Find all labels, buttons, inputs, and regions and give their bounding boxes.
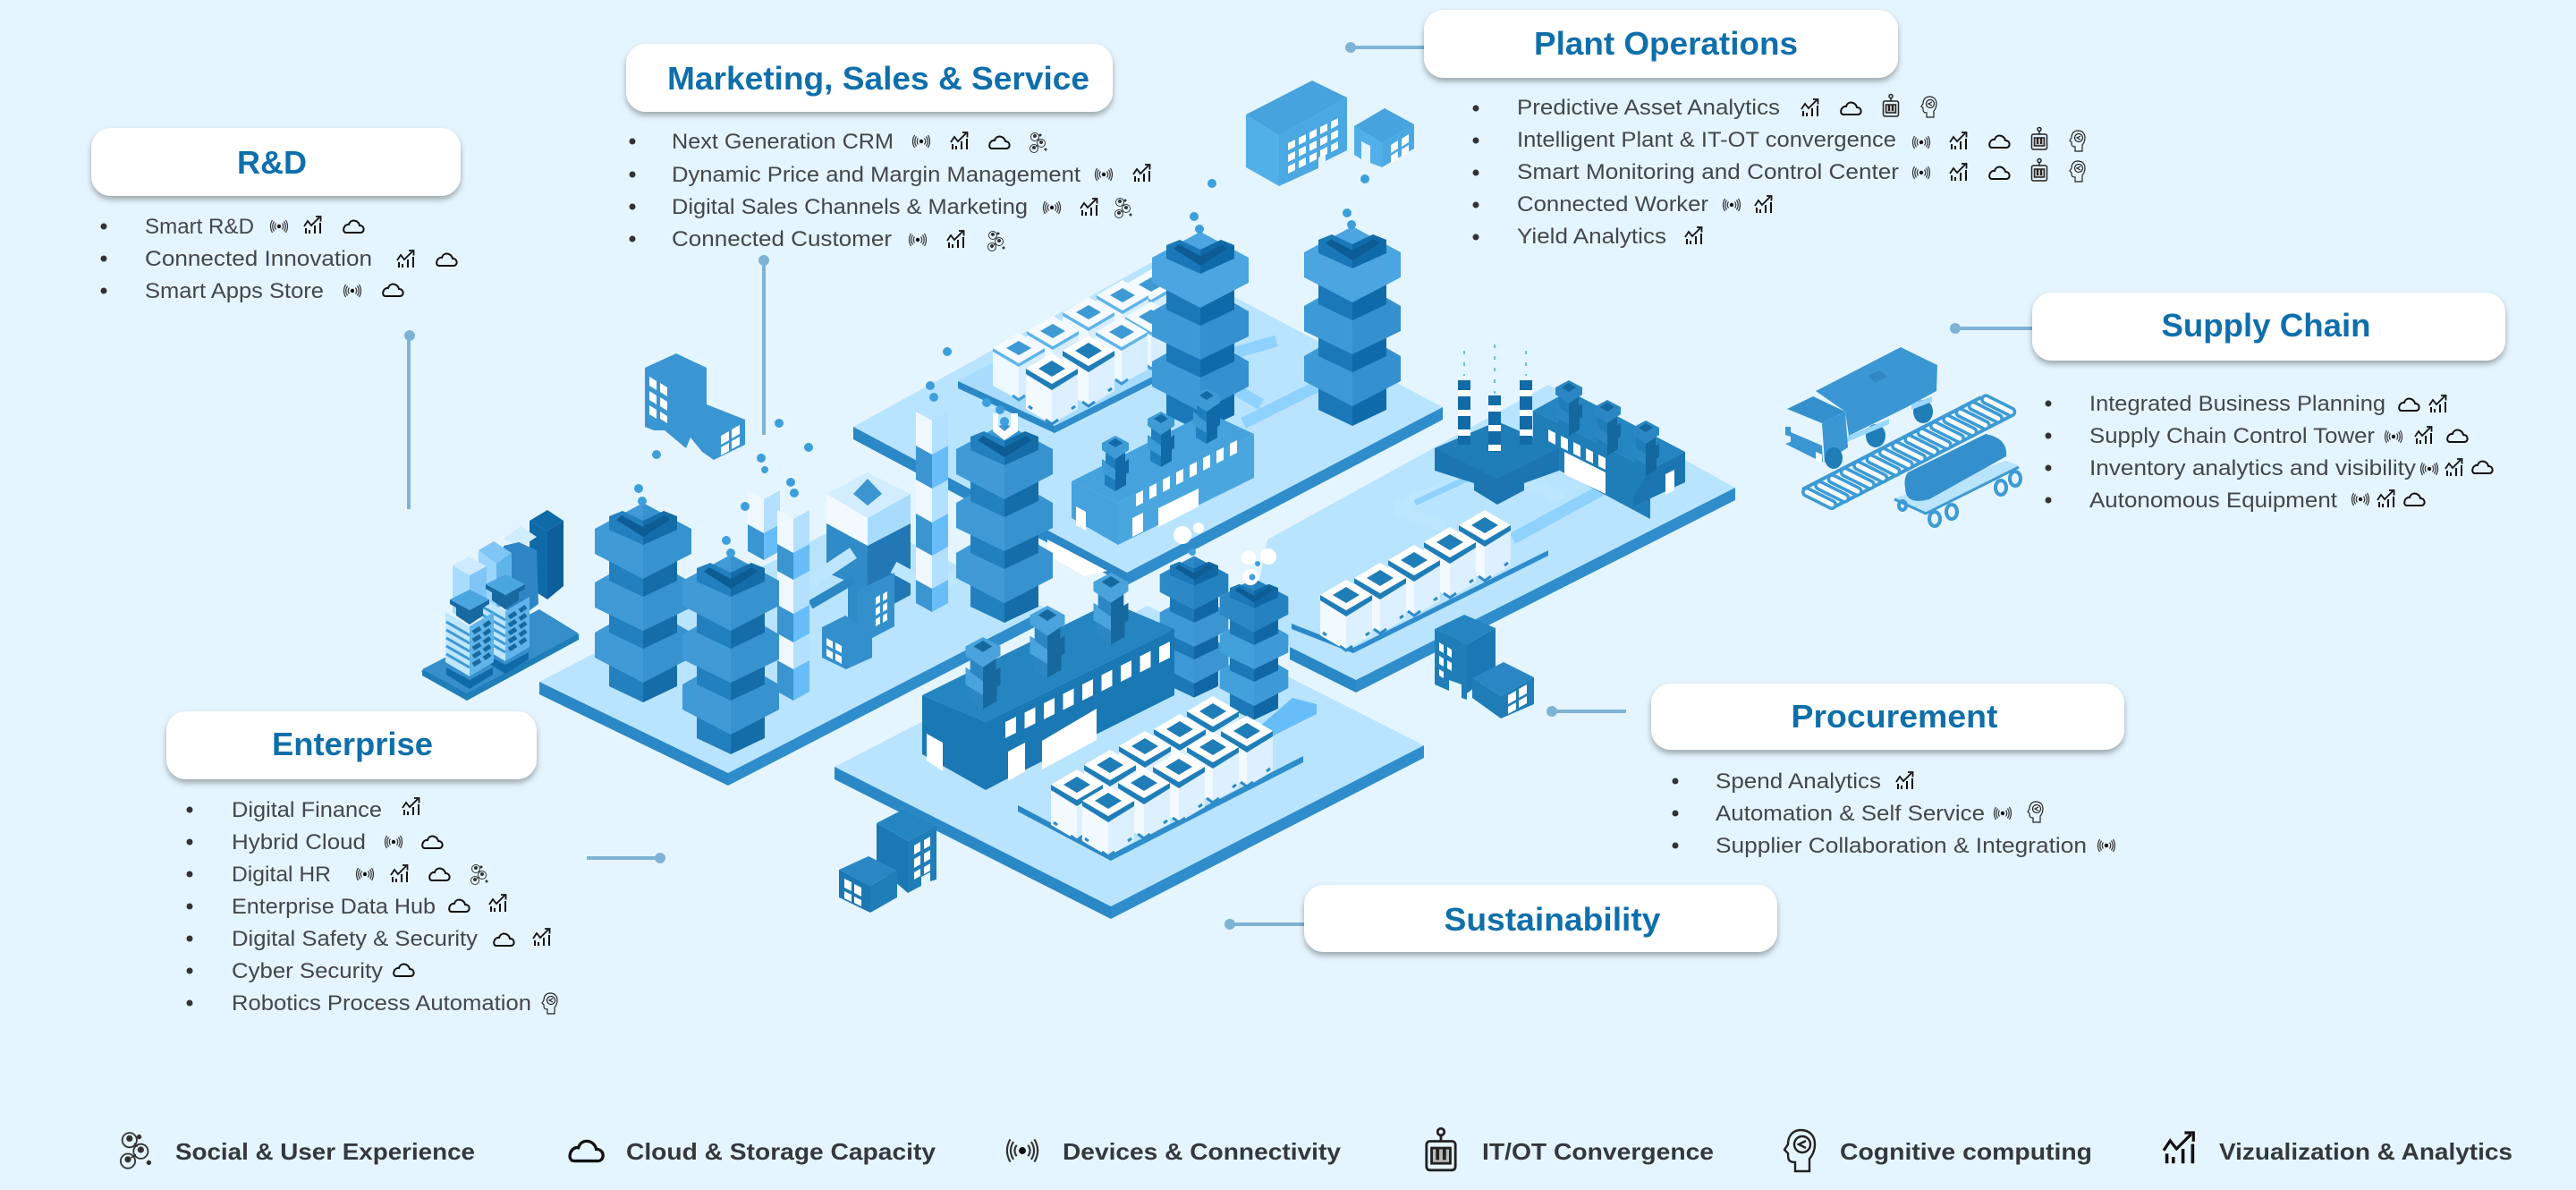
tower: marketing C xyxy=(956,423,1053,623)
list: enterprise items xyxy=(186,798,557,1016)
legend: Cognitive computing xyxy=(1784,1130,2092,1171)
tower: plant 1 xyxy=(1152,232,1249,431)
connector: plant operations xyxy=(1345,42,1424,53)
isometric smart plant illustration xyxy=(422,81,2021,919)
sub-platform: sustainability solar grid xyxy=(1018,698,1317,861)
factory: sustainability xyxy=(922,573,1174,790)
connector: supply chain xyxy=(1950,323,2032,334)
small building: marketing centre xyxy=(822,573,894,669)
solar cubes: sustainability xyxy=(1051,696,1273,856)
list: enterprise items: Digital Safety & Security xyxy=(232,927,478,951)
list: plant items: Predictive Asset Analytics xyxy=(1517,96,1780,120)
list: plant items xyxy=(1472,95,2085,249)
heading: Plant Operations xyxy=(1424,10,1898,78)
platform: supply and procurement xyxy=(1252,385,1735,693)
heading: Enterprise xyxy=(166,711,537,779)
heading: R&D: R&D xyxy=(237,144,307,181)
legend: Social & User Experience xyxy=(121,1133,475,1169)
list: marketing items: Dynamic Price and Margin Management xyxy=(672,163,1080,187)
heading: Marketing, Sales & Service xyxy=(626,44,1113,112)
heading: Procurement xyxy=(1651,684,2124,750)
connector: R&D xyxy=(404,330,415,509)
list: plant items: Connected Worker xyxy=(1517,192,1708,217)
list: marketing items: Connected Customer xyxy=(672,227,892,251)
solar cubes: plant xyxy=(993,269,1177,424)
heading: Plant Operations: Plant Operations xyxy=(1534,25,1798,62)
list: R&D items: Connected Innovation xyxy=(145,247,372,271)
panel: Procurement xyxy=(1651,684,2124,858)
list: enterprise items: Digital HR xyxy=(232,863,331,887)
pipes: plant xyxy=(1225,341,1333,423)
factory: plant xyxy=(1072,388,1254,545)
offshore rig: supply xyxy=(1435,344,1559,505)
list: supply chain items xyxy=(2045,392,2493,513)
panel: Marketing, Sales & Service xyxy=(626,44,1150,251)
list: enterprise items: Robotics Process Automation xyxy=(232,991,531,1016)
tower: marketing B xyxy=(682,555,779,754)
legend: IT/OT Convergence: IT/OT Convergence xyxy=(1482,1138,1714,1165)
list: procurement items: Spend Analytics xyxy=(1716,769,1881,794)
tower: sustainability 2 xyxy=(1220,578,1288,720)
platform: marketing and enterprise xyxy=(539,517,1046,786)
tower: marketing A xyxy=(595,503,691,702)
platform: plant operations xyxy=(853,258,1443,585)
legend: Vizualization & Analytics: Vizualization & Analytics xyxy=(2219,1138,2512,1165)
list: procurement items xyxy=(1673,769,2114,858)
legend: Vizualization & Analytics xyxy=(2164,1133,2512,1165)
legend: IT/OT Convergence xyxy=(1427,1128,1714,1170)
list: supply chain items: Inventory analytics and visibility xyxy=(2089,456,2416,480)
connector: procurement xyxy=(1546,706,1626,717)
striped block and pipes: marketing xyxy=(810,472,984,626)
list: supply chain items: Autonomous Equipment xyxy=(2089,489,2337,513)
striped tower: middle xyxy=(777,510,809,701)
list: enterprise items: Digital Finance xyxy=(232,798,382,822)
tanker wagon xyxy=(1894,434,2021,526)
building: procurement office xyxy=(1435,615,1534,718)
panel: Plant Operations xyxy=(1424,10,2085,249)
list: procurement items: Supplier Collaboration & Integration xyxy=(1716,834,2087,858)
striped tower: left xyxy=(748,490,780,560)
list: enterprise items: Cyber Security xyxy=(232,959,383,983)
panel: Sustainability xyxy=(1304,885,1777,952)
sub-platform and pipes: supply xyxy=(1292,474,1631,653)
heading: Marketing, Sales & Service: Marketing, Sales & Service xyxy=(667,60,1089,97)
smoke cap: marketing C xyxy=(993,413,1018,440)
factory: supply with gate xyxy=(1533,380,1685,519)
truck xyxy=(1785,347,1937,469)
list: supply chain items: Supply Chain Control Tower xyxy=(2089,424,2375,448)
panel: Enterprise xyxy=(166,711,557,1016)
list: procurement items: Automation & Self Service xyxy=(1716,802,1985,826)
solar cubes: supply xyxy=(1320,510,1511,650)
tower: sustainability 1 xyxy=(1160,556,1228,698)
heading: Sustainability: Sustainability xyxy=(1444,901,1660,938)
R&D skyscrapers with rising bars xyxy=(422,510,579,701)
legend xyxy=(121,1128,2512,1171)
list: R&D items xyxy=(100,215,457,303)
heading: Enterprise: Enterprise xyxy=(272,726,433,762)
list: marketing items xyxy=(630,130,1150,251)
panel: Supply Chain xyxy=(2032,293,2505,513)
heading: Supply Chain: Supply Chain xyxy=(2161,307,2370,344)
list: R&D items: Smart R&D xyxy=(145,215,254,239)
building: marketing office xyxy=(645,353,745,460)
heading: Procurement: Procurement xyxy=(1791,698,1998,735)
list: marketing items: Digital Sales Channels & Marketing xyxy=(672,195,1028,219)
panel: R&D xyxy=(91,128,461,303)
list: enterprise items: Enterprise Data Hub xyxy=(232,895,436,919)
building: sustainability office xyxy=(839,810,936,913)
floating data dots xyxy=(634,174,1369,557)
sub-platform: plant solar grid xyxy=(958,295,1216,433)
connector: enterprise xyxy=(587,853,665,863)
heading: Sustainability xyxy=(1304,885,1777,952)
list: R&D items: Smart Apps Store xyxy=(145,279,324,303)
tower: plant 2 xyxy=(1304,226,1401,426)
heading: Supply Chain xyxy=(2032,293,2505,361)
connector: marketing xyxy=(758,255,769,435)
railway track xyxy=(1802,397,2012,507)
legend: Cloud & Storage Capacity: Cloud & Storage Capacity xyxy=(626,1138,936,1165)
legend: Devices & Connectivity: Devices & Connectivity xyxy=(1063,1138,1342,1165)
list: enterprise items: Hybrid Cloud xyxy=(232,830,366,854)
connector: sustainability xyxy=(1224,919,1305,930)
platform: sustainability xyxy=(835,606,1424,919)
building: plant head office xyxy=(1246,81,1414,186)
legend: Cognitive computing: Cognitive computing xyxy=(1840,1138,2092,1165)
smoke: sustainability xyxy=(1174,523,1276,585)
heading: R&D xyxy=(91,128,461,196)
list: plant items: Smart Monitoring and Control Center xyxy=(1517,160,1899,184)
striped tower: right xyxy=(916,412,948,612)
list: marketing items: Next Generation CRM xyxy=(672,130,894,154)
list: supply chain items: Integrated Business Planning xyxy=(2089,392,2385,416)
list: plant items: Yield Analytics xyxy=(1517,225,1666,249)
list: plant items: Intelligent Plant & IT-OT convergence xyxy=(1517,128,1896,152)
legend: Social & User Experience: Social & User Experience xyxy=(175,1138,475,1165)
